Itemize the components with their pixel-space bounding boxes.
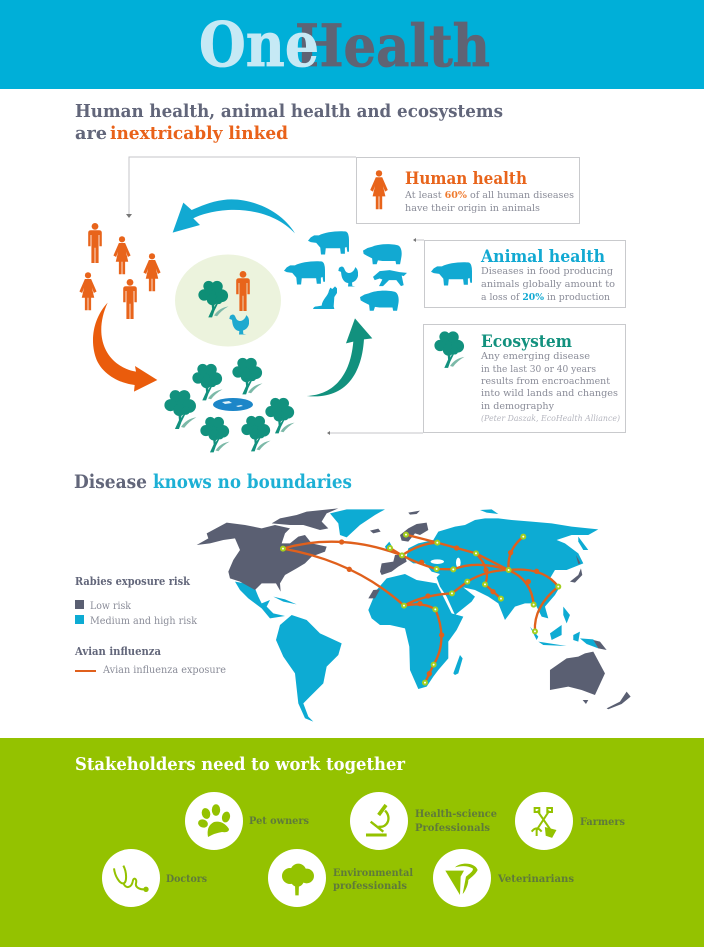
stakeholders heading: Stakeholders need to work together xyxy=(75,754,405,775)
label: professionals xyxy=(333,880,407,892)
label xyxy=(333,867,413,892)
rabies legend title: Rabies exposure risk xyxy=(75,575,190,588)
animal health text: animals globally amount to xyxy=(481,279,615,290)
ecosystem group xyxy=(164,358,295,452)
low risk regions xyxy=(197,508,631,709)
icon: paw xyxy=(197,804,231,837)
ecosystem text: Any emerging disease xyxy=(480,351,590,362)
label: Environmental xyxy=(333,867,413,879)
stakeholder: farmers xyxy=(515,792,625,850)
panel: ecosystem xyxy=(424,324,626,432)
map legend xyxy=(74,575,226,676)
stakeholder: health-science professionals xyxy=(350,792,497,850)
people group xyxy=(79,223,161,319)
ecosystem text: into wild lands and changes xyxy=(481,388,618,399)
ecosystem text xyxy=(480,351,618,412)
title: One: One xyxy=(199,8,319,81)
human health text: At least 60% of all human diseases xyxy=(404,190,574,201)
icon: centre chicken xyxy=(229,314,249,334)
avian influenza routes xyxy=(283,535,558,683)
stakeholder: environmental professionals xyxy=(268,849,413,907)
animal health text xyxy=(481,266,615,303)
icon: centre tree xyxy=(198,281,228,317)
icon: centre man xyxy=(236,271,250,311)
panel: animal health xyxy=(424,240,626,308)
label: Doctors xyxy=(166,873,207,885)
animal health text: a loss of 20% in production xyxy=(481,292,610,303)
avian legend title: Avian influenza xyxy=(74,645,161,658)
cycle diagram xyxy=(79,199,407,452)
label: medium and high risk: Medium and high risk xyxy=(90,616,198,627)
inland seas xyxy=(431,558,461,568)
ecosystem text: in the last 30 or 40 years xyxy=(481,364,596,375)
arrow: orange xyxy=(93,303,157,392)
label: Health-science xyxy=(415,808,497,820)
label: Veterinarians xyxy=(497,873,574,885)
label xyxy=(415,808,497,834)
swatch: avian line xyxy=(75,670,96,672)
arrow: teal xyxy=(307,318,372,396)
stakeholder: veterinarians xyxy=(433,849,574,907)
heading: disease: Disease xyxy=(74,471,147,493)
animals group xyxy=(284,231,407,311)
panel: human health xyxy=(356,158,580,224)
stakeholder: doctors xyxy=(102,849,207,907)
human health text xyxy=(404,190,574,214)
header band xyxy=(0,0,704,89)
swatch: medium and high risk xyxy=(75,615,84,624)
centre circle xyxy=(175,254,281,346)
heading: disease: knows no boundaries xyxy=(153,471,352,493)
stakeholder: pet owners xyxy=(185,792,309,850)
connector arrows xyxy=(126,157,424,435)
label: Pet owners xyxy=(249,815,309,827)
human health text: have their origin in animals xyxy=(405,203,540,214)
label: low risk: Low risk xyxy=(90,601,132,612)
panel: stakeholders xyxy=(0,738,704,947)
icon: cow xyxy=(431,262,472,285)
animal health heading: Animal health xyxy=(480,247,605,267)
human health heading: Human health xyxy=(405,169,527,189)
title: Health: Health xyxy=(295,12,490,80)
heading: linked xyxy=(75,101,503,144)
label: Farmers xyxy=(580,816,625,828)
cycle arrows xyxy=(93,199,372,396)
arrow: blue xyxy=(173,199,295,233)
icon: V emblem xyxy=(445,864,478,895)
label: avian exposure: Avian influenza exposure xyxy=(102,665,226,676)
icon: tree xyxy=(434,331,464,368)
heading: linked: inextricably linked xyxy=(110,123,288,144)
icon: shovel and fork xyxy=(532,808,555,837)
ecosystem heading: Ecosystem xyxy=(481,332,572,352)
heading: disease xyxy=(74,471,352,493)
icon: tree xyxy=(282,864,314,895)
world map xyxy=(197,508,631,722)
route direction markers xyxy=(339,539,539,676)
ecosystem text: results from encroachment xyxy=(481,376,610,387)
route nodes xyxy=(281,533,560,685)
icon: microscope xyxy=(366,805,388,835)
icon: stethoscope xyxy=(114,866,148,891)
swatch: low risk xyxy=(75,600,84,609)
citation: (Peter Daszak, EcoHealth Alliance) xyxy=(481,414,620,423)
icon: pond xyxy=(213,398,253,411)
animal health text: Diseases in food producing xyxy=(481,266,613,277)
medium and high risk regions xyxy=(235,509,598,722)
heading: linked: Human health, animal health and ecosystems xyxy=(75,101,503,122)
heading: linked: are xyxy=(75,123,107,144)
ecosystem text: in demography xyxy=(481,401,555,412)
icon: woman xyxy=(370,170,388,209)
label: Professionals xyxy=(415,822,490,834)
